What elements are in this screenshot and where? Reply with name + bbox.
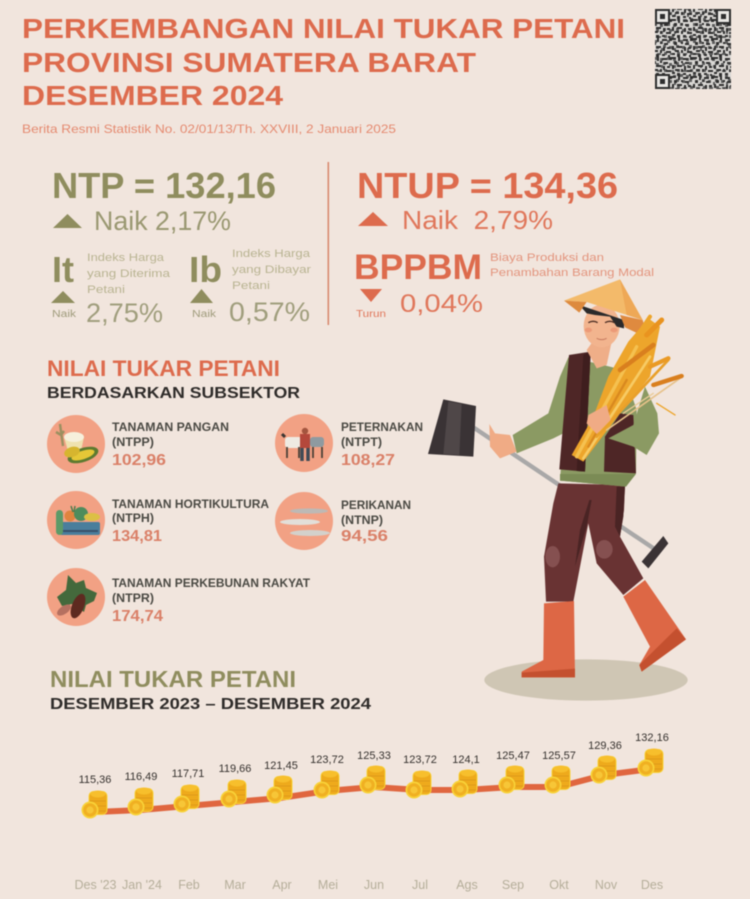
icon: fruit and vegetables <box>47 491 105 549</box>
NTUP change: Naik 2,79% <box>402 205 553 235</box>
chart axis: months: Nov <box>595 878 618 892</box>
panel: tanaman pangan <box>47 415 229 473</box>
icon: BPPBM down arrow <box>360 289 382 302</box>
label <box>341 422 423 469</box>
label: PETERNAKAN <box>341 422 423 434</box>
label: (NTPR) <box>112 593 154 605</box>
QR code <box>655 9 731 89</box>
It index: Petani <box>87 284 125 296</box>
It index: yang Diterima <box>87 268 171 280</box>
line chart: NTP trend: 115,36 <box>79 774 111 786</box>
Ib index: 0,57% <box>229 297 310 327</box>
line chart: NTP trend: 123,72 <box>403 754 437 766</box>
line chart: NTP trend: 123,72 <box>310 754 344 766</box>
NTP value: NTP = 132,16 <box>52 165 276 206</box>
icon: fish <box>275 492 333 550</box>
label: TANAMAN HORTIKULTURA <box>112 499 269 511</box>
chart axis: months: Mei <box>318 878 338 892</box>
Ib index <box>189 248 311 327</box>
line chart: NTP trend: 129,36 <box>588 740 622 752</box>
Ib index: yang Dibayar <box>232 264 311 276</box>
chart axis: months: Jan '24 <box>122 878 162 892</box>
panel: NTUP <box>354 165 654 320</box>
trend heading: DESEMBER 2023 – DESEMBER 2024 <box>50 696 371 713</box>
icon: cocoa <box>47 568 105 626</box>
line chart: NTP trend: 119,66 <box>219 763 251 775</box>
It index: It <box>52 249 74 290</box>
BPPBM change: 0,04% <box>400 290 483 318</box>
label <box>112 499 269 545</box>
It index <box>51 249 171 328</box>
line chart: NTP trend: 121,45 <box>264 760 298 772</box>
title: PERKEMBANGAN NILAI TUKAR PETANI <box>22 13 625 44</box>
chart axis: months: Des '23 <box>74 878 117 892</box>
BPPBM direction: Turun <box>356 309 386 320</box>
panel: NTP <box>51 165 311 328</box>
line chart: NTP trend: 124,1 <box>452 754 480 766</box>
label: 108,27 <box>341 452 395 469</box>
source line: Berita Resmi Statistik No. 02/01/13/Th. XXVIII, 2 Januari 2025 <box>22 122 396 136</box>
Ib index: Naik <box>192 309 217 320</box>
illustration: farmer with hoe and wheat <box>428 279 688 701</box>
label <box>341 500 411 545</box>
chart axis: months: Apr <box>272 878 292 892</box>
chart axis: months: Feb <box>178 878 200 892</box>
label <box>112 422 229 469</box>
panel: peternakan <box>275 414 423 472</box>
label: TANAMAN PANGAN <box>112 422 229 434</box>
chart axis: months <box>74 878 663 892</box>
line chart: NTP trend: 125,47 <box>496 750 530 762</box>
chart axis: months: Des <box>641 878 663 892</box>
label: 174,74 <box>112 608 163 625</box>
NTP change: Naik 2,17% <box>94 206 231 236</box>
line chart: NTP trend <box>79 732 669 818</box>
line chart: NTP trend: 132,16 <box>635 732 669 744</box>
line chart: NTP trend: 116,49 <box>125 771 157 783</box>
label <box>112 578 310 625</box>
trend heading: NILAI TUKAR PETANI <box>50 666 296 692</box>
panel: perikanan <box>275 492 411 550</box>
BPPBM description: Biaya Produksi dan <box>490 252 604 264</box>
It index: Naik <box>52 309 77 320</box>
subsector heading: NILAI TUKAR PETANI <box>47 356 280 381</box>
panel: tanaman perkebunan rakyat <box>47 568 310 626</box>
BPPBM value: BPPBM <box>354 248 482 287</box>
label: TANAMAN PERKEBUNAN RAKYAT <box>112 578 310 590</box>
chart axis: months: Sep <box>502 878 524 892</box>
Ib index: Ib <box>189 249 222 290</box>
icon: NTUP up arrow <box>358 212 388 226</box>
chart axis: months: Okt <box>549 878 569 892</box>
chart axis: months: Mar <box>224 878 246 892</box>
label: 102,96 <box>112 452 166 469</box>
icon: rice and corn <box>47 415 105 473</box>
line chart: NTP trend: 125,33 <box>357 750 391 762</box>
It index: Indeks Harga <box>87 252 165 264</box>
line chart: NTP trend: 117,71 <box>172 768 204 780</box>
Ib index: Petani <box>232 280 270 292</box>
label: (NTNP) <box>341 515 383 527</box>
chart axis: months: Jun <box>364 878 384 892</box>
BPPBM description <box>490 252 654 279</box>
label: 94,56 <box>341 528 388 545</box>
panel: tanaman hortikultura <box>47 491 269 549</box>
subsector heading: BERDASARKAN SUBSEKTOR <box>47 385 300 402</box>
chart axis: months: Ags <box>456 878 478 892</box>
NTUP value: NTUP = 134,36 <box>357 165 618 206</box>
icon: NTP up arrow <box>53 214 82 228</box>
Ib index: Indeks Harga <box>232 248 311 260</box>
label: PERIKANAN <box>341 500 411 512</box>
label: 134,81 <box>112 528 162 545</box>
chart axis: months: Jul <box>412 878 428 892</box>
line chart: NTP trend: 125,57 <box>542 750 576 762</box>
icon: farmer and cow <box>275 414 333 472</box>
title: DESEMBER 2024 <box>22 80 283 111</box>
subsector heading <box>47 356 300 402</box>
trend heading <box>50 666 371 713</box>
BPPBM description: Penambahan Barang Modal <box>490 267 654 279</box>
label: (NTPH) <box>112 513 154 525</box>
It index: 2,75% <box>86 298 163 328</box>
label: (NTPT) <box>341 437 382 449</box>
title: PROVINSI SUMATERA BARAT <box>22 47 476 78</box>
title <box>22 13 625 111</box>
label: (NTPP) <box>112 437 154 449</box>
